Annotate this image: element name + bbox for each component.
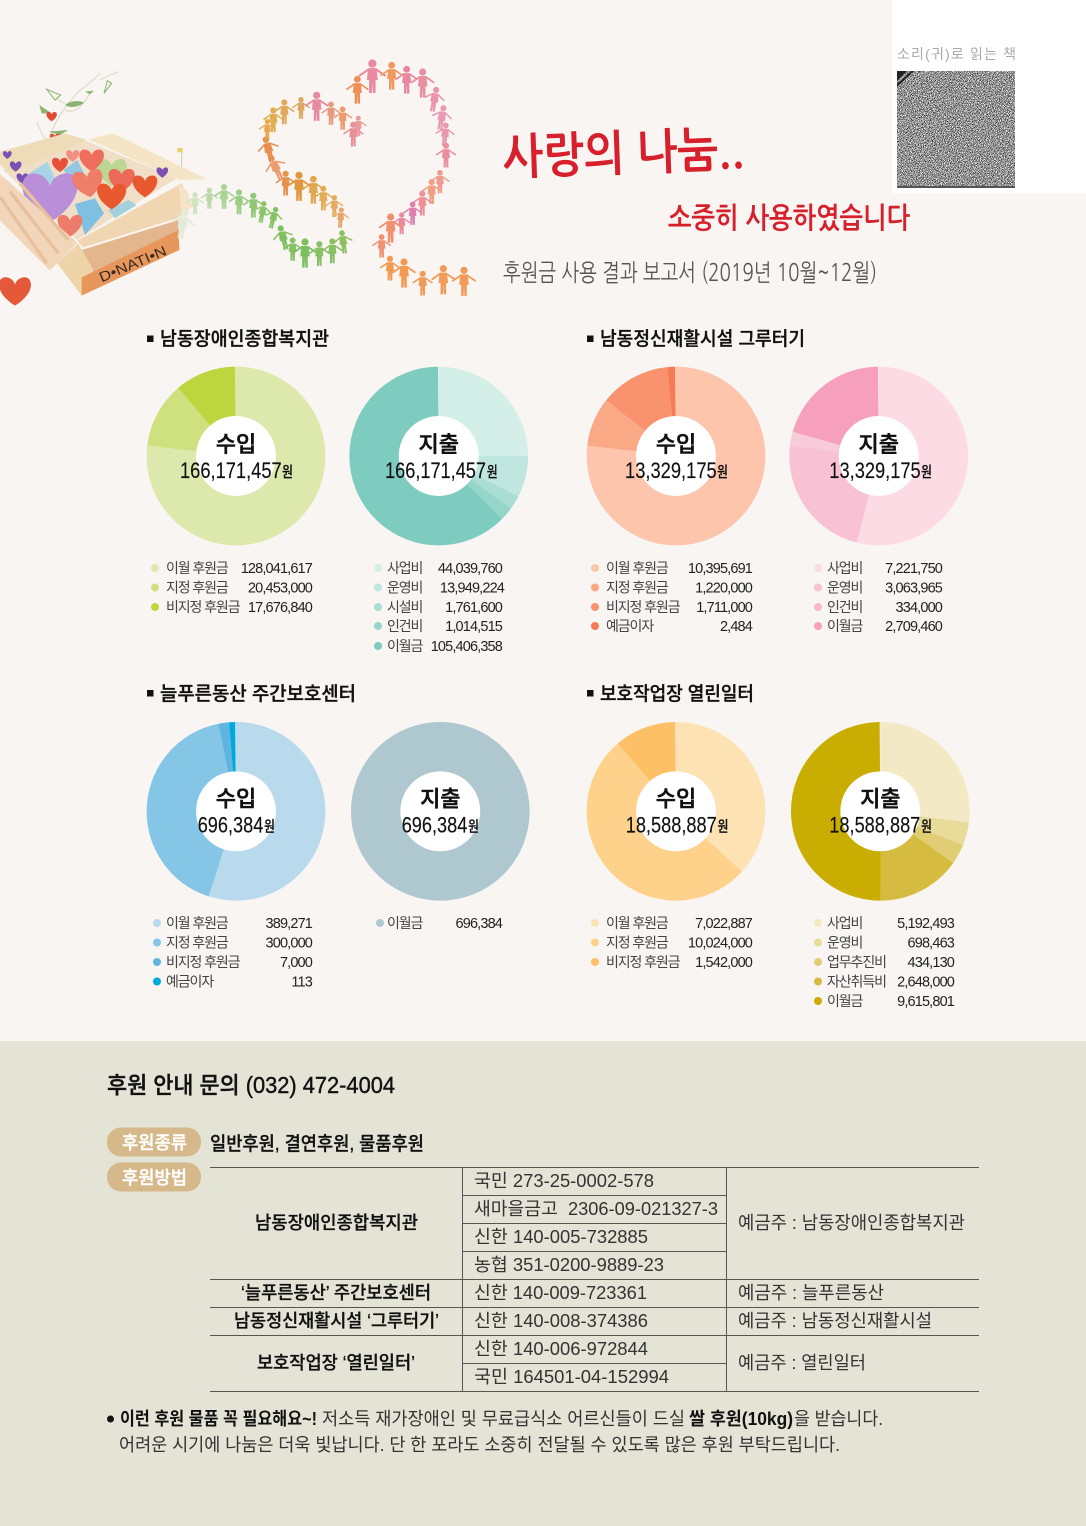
donut chart: income: 수입	[216, 432, 256, 457]
panel: Yeollin workshop	[587, 683, 955, 1010]
organisation names: ‘늘푸른동산’ 주간보호센터	[241, 1283, 431, 1303]
legend: expense: 이월금	[827, 618, 864, 634]
account holders: 예금주 : 늘푸른동산	[738, 1283, 884, 1303]
legend: expense: 434,130	[908, 955, 955, 971]
donut chart: income: 원	[717, 464, 728, 481]
organisation names: 남동장애인종합복지관	[255, 1213, 418, 1233]
donut chart: income: 원	[282, 464, 293, 481]
legend: expense: 사업비	[387, 560, 423, 576]
donut chart: expense: 지출	[858, 432, 899, 457]
heading: 늘푸른동산 주간보호센터	[160, 683, 356, 705]
legend: income	[591, 560, 753, 635]
donut chart: expense: 13,329,175	[829, 458, 921, 483]
legend: income: 7,000	[280, 955, 313, 971]
legend: expense: 13,949,224	[440, 580, 505, 596]
legend: expense: 운영비	[827, 580, 863, 596]
donut chart: income	[611, 747, 741, 876]
icon: sprout	[37, 72, 183, 167]
legend: income: 예금이자	[166, 974, 214, 990]
legend: income: 128,041,617	[241, 561, 313, 577]
legend: expense	[814, 560, 943, 635]
account numbers: 신한 140-009-723361	[474, 1283, 647, 1303]
report subtitle: 후원금 사용 결과 보고서 (2019년 10월~12월)	[503, 261, 877, 285]
organisation names: 보호작업장 ‘열린일터’	[257, 1353, 415, 1373]
legend: income: 1,711,000	[696, 600, 753, 616]
callout: rice donation request: 쌀 후원(10kg)	[689, 1409, 793, 1429]
donut chart: income	[171, 391, 301, 521]
account numbers: 신한 140-008-374386	[474, 1311, 648, 1331]
account numbers: 신한 140-006-972844	[474, 1339, 648, 1359]
legend: income: 389,271	[266, 916, 313, 932]
legend: expense	[374, 560, 505, 655]
legend: expense: 자산취득비	[827, 974, 886, 990]
heading: 남동장애인종합복지관	[160, 328, 329, 350]
legend: income: 1,220,000	[695, 580, 753, 596]
illustration: donation box and paper people chain	[0, 59, 476, 306]
legend: expense: 698,463	[908, 936, 955, 952]
legend: income: 이월 후원금	[606, 915, 669, 931]
legend: expense	[376, 915, 503, 932]
legend: expense: 1,761,600	[445, 600, 503, 616]
heading: 남동정신재활시설 그루터기	[600, 328, 805, 350]
legend: income	[153, 915, 313, 990]
donut chart: expense: 원	[487, 464, 498, 481]
legend: expense: 334,000	[896, 600, 943, 616]
donut chart: income: 696,384	[198, 812, 263, 837]
legend: income	[591, 915, 753, 971]
donut chart: expense: 지출	[418, 432, 459, 457]
account holders: 예금주 : 남동장애인종합복지관	[738, 1213, 965, 1233]
account holders: 예금주 : 열린일터	[738, 1353, 866, 1373]
legend: income: 비지정 후원금	[166, 954, 241, 970]
donut chart: income: 13,329,175	[625, 458, 717, 483]
callout: rice donation request	[107, 1409, 883, 1455]
legend: expense: 3,063,965	[885, 580, 943, 596]
legend: income: 지정 후원금	[166, 580, 229, 596]
legend: income: 10,024,000	[688, 936, 753, 952]
legend: income: 7,022,887	[695, 916, 753, 932]
pill: donation types	[107, 1128, 201, 1156]
QR caption: 소리(귀)로 읽는 책	[897, 46, 1016, 62]
people chain	[169, 59, 476, 296]
donut chart: income: 수입	[216, 786, 256, 811]
donut chart: expense: 166,171,457	[385, 458, 486, 483]
legend: income: 20,453,000	[248, 580, 313, 596]
organisation names	[234, 1213, 439, 1373]
title: love sharing: 사랑의 나눔..	[502, 125, 745, 182]
panel: Namdong welfare center	[147, 328, 505, 655]
callout: rice donation request: 어려운 시기에 나눔은 더욱 빛납니다. 단 한 포라도 소중히 전달될 수 있도록 많은 후원 부탁드립니다.	[119, 1435, 840, 1455]
table: bank accounts	[210, 1167, 979, 1392]
account holders	[738, 1213, 965, 1373]
donut chart: income: 수입	[656, 786, 696, 811]
legend: expense: 사업비	[827, 560, 863, 576]
legend: expense: 업무추진비	[827, 954, 886, 970]
organisation names: 남동정신재활시설 ‘그루터기’	[234, 1311, 439, 1331]
donut chart: expense: 원	[921, 464, 932, 481]
legend: expense: 696,384	[456, 916, 503, 932]
legend: income: 지정 후원금	[606, 934, 669, 950]
donut chart: expense	[374, 391, 503, 521]
box label: D•NATI•N	[97, 242, 169, 285]
legend: expense: 시설비	[387, 599, 423, 615]
callout: rice donation request: 을 받습니다.	[794, 1409, 883, 1429]
account holders: 예금주 : 남동정신재활시설	[738, 1311, 932, 1331]
panel: audio QR code	[892, 0, 1086, 193]
donut chart: income	[611, 391, 741, 521]
legend: expense: 5,192,493	[897, 916, 955, 932]
icon: donation box	[0, 133, 207, 296]
legend: income: 지정 후원금	[166, 934, 229, 950]
panel: Geuruteogi rehabilitation facility	[587, 328, 943, 635]
legend: expense: 운영비	[827, 934, 863, 950]
donut chart: expense	[816, 747, 945, 876]
pill: donation methods: 후원방법	[122, 1168, 187, 1188]
donut chart: expense: 696,384	[402, 812, 467, 837]
account numbers: 농협 351-0200-9889-23	[474, 1255, 664, 1275]
donut chart: income: 166,171,457	[180, 458, 282, 483]
icon: small heart	[0, 277, 31, 306]
account numbers: 신한 140-005-732885	[474, 1227, 648, 1247]
subtitle: used preciously: 소중히 사용하였습니다	[668, 203, 911, 233]
callout: rice donation request: 이런 후원 물품 꼭 필요해요~!	[120, 1409, 317, 1429]
donation types text: 일반후원, 결연후원, 물품후원	[210, 1133, 424, 1155]
legend: income: 지정 후원금	[606, 580, 669, 596]
legend: income: 비지정 후원금	[606, 599, 681, 615]
legend: expense: 44,039,760	[438, 561, 503, 577]
callout: rice donation request: 저소득 재가장애인 및 무료급식소 어르신들이 드실	[322, 1409, 685, 1429]
legend: expense: 이월금	[387, 915, 424, 931]
donut chart: income: 원	[718, 818, 728, 835]
legend: expense: 이월금	[827, 993, 864, 1009]
donut chart: expense	[814, 391, 943, 521]
legend: expense: 이월금	[387, 638, 424, 654]
donut chart: expense: 원	[468, 818, 479, 835]
account numbers	[474, 1171, 718, 1387]
legend: expense: 2,709,460	[885, 619, 943, 635]
legend: income: 예금이자	[606, 618, 654, 634]
legend: income: 비지정 후원금	[166, 599, 241, 615]
legend: income: 1,542,000	[695, 955, 753, 971]
donut chart: income: 원	[264, 818, 275, 835]
account numbers: 국민 164501-04-152994	[474, 1367, 669, 1387]
pill: donation types: 후원종류	[122, 1133, 187, 1153]
legend: expense: 인건비	[827, 599, 863, 615]
legend: expense: 7,221,750	[885, 561, 943, 577]
donut chart: income	[171, 747, 301, 876]
legend: income: 이월 후원금	[166, 560, 229, 576]
donut chart: income: 수입	[656, 432, 696, 457]
donut chart: expense: 18,588,887	[829, 812, 920, 837]
legend: expense: 2,648,000	[897, 974, 955, 990]
legend: expense: 운영비	[387, 580, 423, 596]
account numbers: 새마을금고 2306-09-021327-3	[474, 1199, 718, 1219]
heading: 보호작업장 열린일터	[600, 683, 754, 705]
legend: expense: 사업비	[827, 915, 863, 931]
legend: income: 이월 후원금	[606, 560, 669, 576]
legend: expense: 9,615,801	[897, 994, 955, 1010]
panel: donation information	[0, 1041, 1086, 1526]
legend: income: 113	[291, 974, 313, 990]
legend: expense: 인건비	[387, 618, 423, 634]
pill: donation methods	[107, 1162, 201, 1192]
contact heading: 후원 안내 문의 (032) 472-4004	[107, 1072, 395, 1098]
donut chart: expense	[376, 747, 505, 876]
legend: income: 10,395,691	[688, 561, 753, 577]
legend: income: 300,000	[266, 936, 313, 952]
legend: income: 비지정 후원금	[606, 954, 681, 970]
legend: income	[151, 560, 313, 616]
panel: Neulpureun day care center	[147, 683, 505, 990]
donut chart: income: 18,588,887	[626, 812, 717, 837]
legend: expense: 105,406,358	[431, 639, 503, 655]
donut chart: expense: 지출	[860, 786, 901, 811]
legend: income: 17,676,840	[248, 600, 313, 616]
legend: expense: 1,014,515	[445, 619, 503, 635]
donut chart: expense: 지출	[420, 786, 461, 811]
donut chart: expense: 원	[921, 818, 932, 835]
legend: expense	[814, 915, 955, 1010]
legend: income: 2,484	[720, 619, 753, 635]
QR code	[897, 71, 1015, 188]
account numbers: 국민 273-25-0002-578	[474, 1171, 654, 1191]
legend: income: 이월 후원금	[166, 915, 229, 931]
